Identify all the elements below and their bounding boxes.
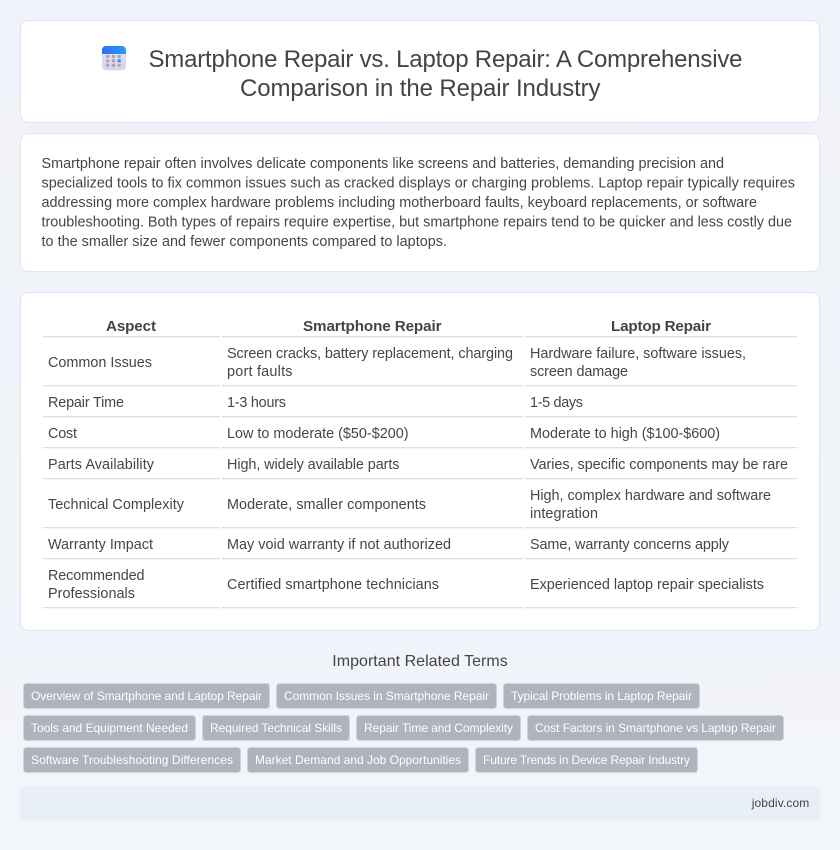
row: warranty impact: May void warranty if not authorized — [227, 537, 451, 553]
panel: header — [20, 20, 820, 122]
row: technical complexity: Moderate, smaller components — [227, 497, 426, 513]
text block: introduction paragraph: Smartphone repair often involves delicate components like screens and batteries, demanding precision and — [42, 156, 724, 172]
row: repair time — [43, 395, 797, 417]
row: warranty impact: Warranty Impact — [48, 537, 153, 553]
row: recommended professionals: Certified smartphone technicians — [227, 577, 439, 593]
row: common issues: Hardware failure, software issues, — [530, 346, 746, 362]
text block: introduction paragraph — [42, 156, 795, 250]
row: parts availability: Parts Availability — [48, 457, 155, 473]
heading: related terms: Important Related Terms — [332, 653, 508, 670]
footer — [20, 786, 820, 820]
row: warranty impact — [43, 537, 797, 559]
tag: Future Trends in Device Repair Industry — [483, 753, 690, 767]
row: technical complexity: integration — [530, 506, 598, 522]
text block: introduction paragraph: specialized tools to fix common issues such as cracked displays or charging problems. Laptop repair typically requires — [42, 176, 795, 192]
tag: Market Demand and Job Opportunities — [255, 753, 461, 767]
tag: Cost Factors in Smartphone vs Laptop Repair — [535, 721, 776, 735]
row: technical complexity — [43, 488, 797, 528]
text block: introduction paragraph: to the smaller size and fewer components compared to laptops. — [42, 234, 447, 250]
title: Smartphone Repair vs. Laptop Repair: A Comprehensive — [148, 46, 742, 73]
row: recommended professionals: Experienced laptop repair specialists — [530, 577, 764, 593]
tag: Repair Time and Complexity — [364, 721, 513, 735]
tag — [528, 716, 784, 740]
row: common issues: Screen cracks, battery replacement, charging — [227, 346, 513, 362]
row: parts availability: High, widely available parts — [227, 457, 400, 473]
row: common issues: screen damage — [530, 364, 628, 380]
tag — [476, 748, 698, 772]
table header row — [43, 318, 797, 337]
tag: Common Issues in Smartphone Repair — [284, 689, 489, 703]
panel: related term tags — [24, 684, 784, 772]
table header row: Smartphone Repair — [303, 318, 442, 335]
tag: Overview of Smartphone and Laptop Repair — [31, 689, 262, 703]
row: repair time: Repair Time — [48, 395, 124, 411]
tag: Software Troubleshooting Differences — [31, 753, 233, 767]
row: parts availability — [43, 457, 797, 479]
tag: Required Technical Skills — [210, 721, 342, 735]
row: cost: Cost — [48, 426, 77, 442]
table header row: Aspect — [106, 318, 156, 335]
title — [148, 46, 742, 102]
row: technical complexity: Technical Complexity — [48, 497, 185, 513]
tag: Tools and Equipment Needed — [31, 721, 188, 735]
tag — [356, 716, 520, 740]
row: cost: Moderate to high ($100-$600) — [530, 426, 720, 442]
tag — [24, 748, 240, 772]
tag — [504, 684, 700, 708]
row: recommended professionals: Recommended — [48, 568, 144, 584]
row: repair time: 1-5 days — [530, 395, 583, 411]
tag: Typical Problems in Laptop Repair — [511, 689, 692, 703]
table header row: Laptop Repair — [611, 318, 711, 335]
panel: introduction — [20, 134, 820, 272]
row: common issues — [43, 346, 797, 386]
row: repair time: 1-3 hours — [227, 395, 286, 411]
tag — [276, 684, 496, 708]
tag — [24, 716, 196, 740]
text block: introduction paragraph: addressing more complex hardware problems including motherboard faults, keyboard replacements, or software — [42, 195, 757, 211]
icon: calendar — [102, 46, 126, 70]
row: parts availability: Varies, specific components may be rare — [530, 457, 788, 473]
tag — [248, 748, 468, 772]
row: warranty impact: Same, warranty concerns apply — [530, 537, 730, 553]
row: cost — [43, 426, 797, 448]
title: Comparison in the Repair Industry — [240, 75, 600, 102]
row: common issues: port faults — [227, 364, 292, 380]
row: cost: Low to moderate ($50-$200) — [227, 426, 408, 442]
panel: comparison table — [20, 292, 820, 630]
row: recommended professionals: Professionals — [48, 586, 135, 602]
row: recommended professionals — [43, 568, 797, 608]
tag — [24, 684, 270, 708]
footer: jobdiv.com — [751, 796, 809, 810]
text block: introduction paragraph: troubleshooting. Both types of repairs require expertise, but smartphone repairs tend to be quicker and less costly due — [42, 214, 792, 230]
row: common issues: Common Issues — [48, 355, 152, 371]
row: technical complexity: High, complex hardware and software — [530, 488, 771, 504]
tag — [202, 716, 350, 740]
